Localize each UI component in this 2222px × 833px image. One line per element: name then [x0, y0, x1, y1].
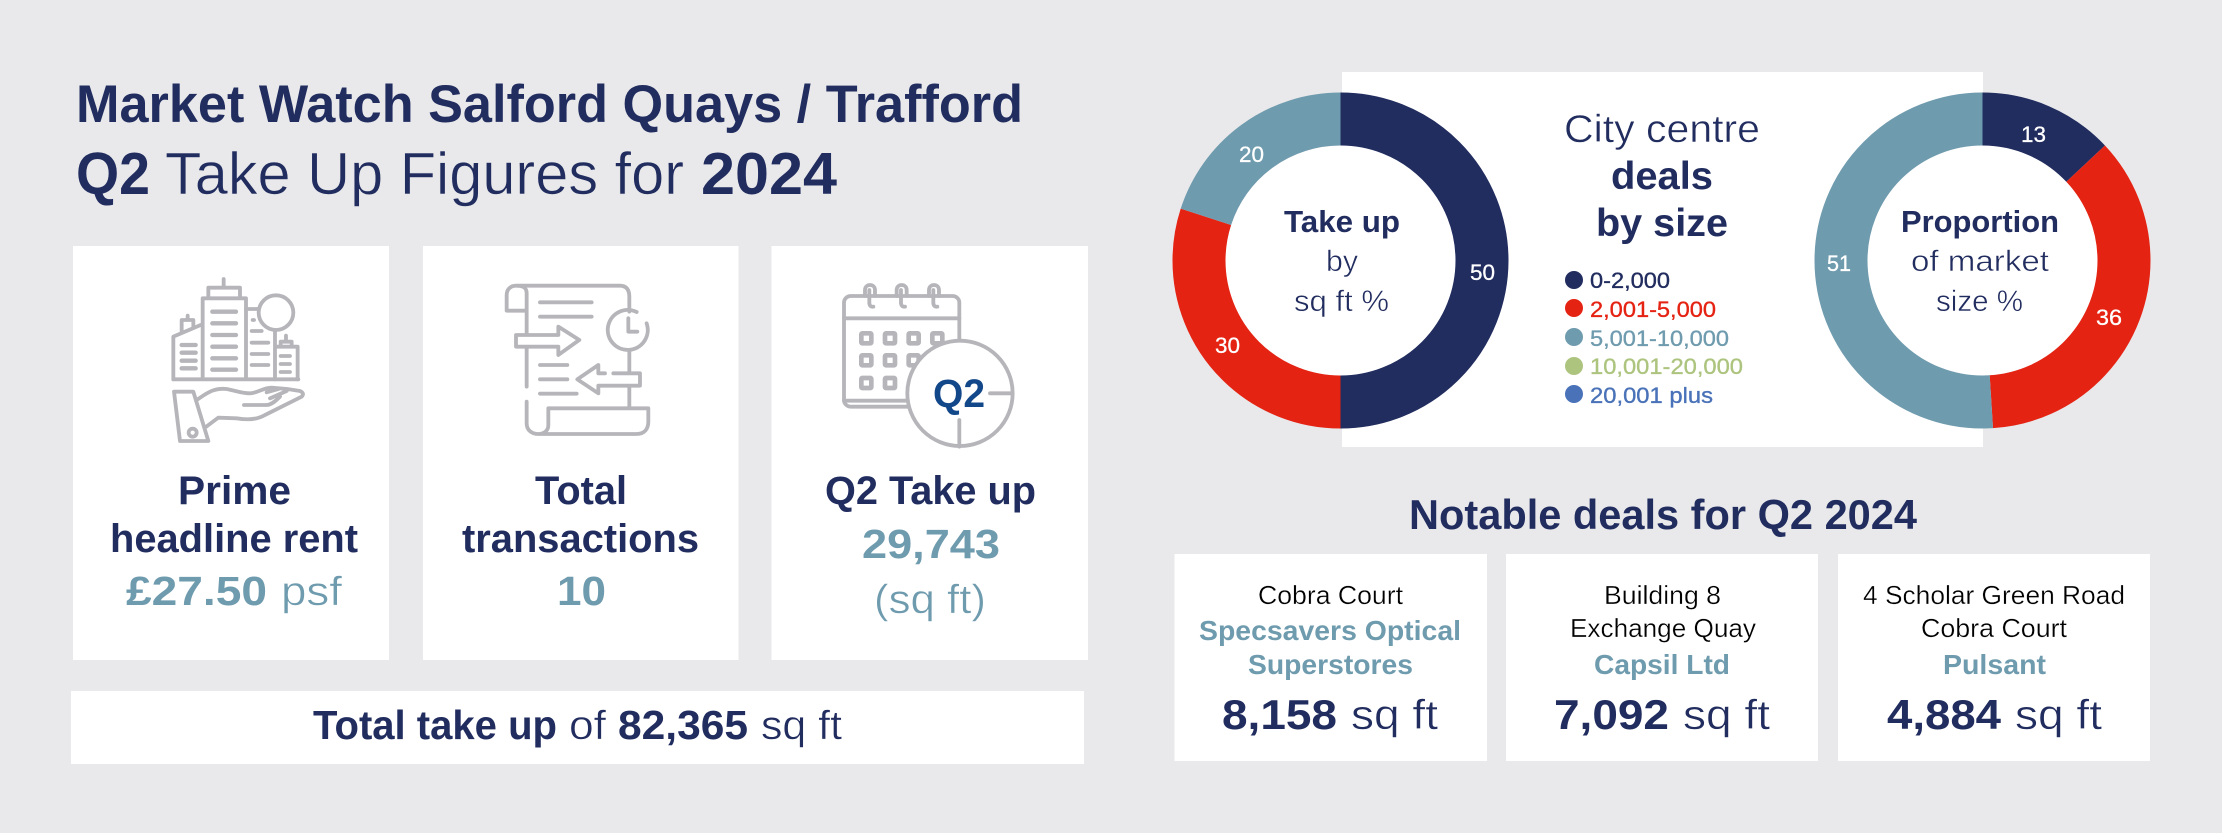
legend: 20,001 plus [1590, 383, 1713, 408]
donut chart: take up by sq ft [1199, 119, 1495, 402]
value: Q2 take up [862, 521, 1000, 622]
label: prime headline rent [110, 469, 358, 561]
label: prime headline rent: Prime [178, 469, 291, 513]
legend: 5,001-10,000 [1590, 326, 1729, 351]
deal card: Capsil: Capsil Ltd [1594, 649, 1730, 680]
donut chart: take up by sq ft: 30 [1215, 333, 1240, 358]
legend: 2,001-5,000 [1590, 297, 1716, 322]
donut centre label: take up [1284, 204, 1400, 318]
donut chart: proportion of market size [1827, 119, 2124, 402]
deal card: Capsil: Building 8 [1604, 580, 1721, 610]
value: rent: £27.50 [126, 568, 267, 614]
icon: scroll with arrows and clock [507, 286, 648, 434]
deal card: Specsavers [1174, 554, 1487, 761]
label: prime headline rent: headline rent [110, 517, 358, 561]
deal card: Capsil [1506, 554, 1818, 761]
heading: city centre deals by size: deals [1611, 155, 1713, 198]
deal card: Pulsant: 4 Scholar Green Road [1863, 580, 2125, 610]
deal card: Specsavers: Cobra Court [1258, 580, 1404, 610]
panel: city centre deals by size [1342, 72, 1983, 447]
deal card: Pulsant [1838, 554, 2150, 761]
total take up bar [71, 691, 1084, 764]
heading: city centre deals by size [1564, 108, 1760, 245]
label: total transactions: Total [535, 469, 627, 513]
deal card: Pulsant: Cobra Court [1921, 613, 2068, 643]
title [76, 75, 1023, 207]
donut centre label: take up: Take up [1284, 204, 1400, 239]
icon: calendar with Q2 clock [844, 285, 1013, 447]
deal card: Specsavers: Superstores [1248, 649, 1413, 680]
donut centre label: take up: sq ft % [1294, 285, 1389, 318]
donut chart: proportion of market size: 51 [1827, 251, 1851, 276]
value: rent [126, 568, 343, 614]
deal card: Pulsant: Pulsant [1943, 649, 2046, 680]
value: Q2 take up: (sq ft) [874, 576, 986, 622]
value: rent: psf [281, 568, 343, 614]
donut centre label: proportion: Proportion [1901, 204, 2059, 239]
legend: 0-2,000 [1590, 268, 1670, 293]
title: 2024 [701, 141, 837, 207]
donut centre label: proportion: of market [1911, 245, 2050, 278]
total take up bar: sq ft [761, 702, 843, 748]
icon: buildings on open hand [173, 279, 303, 441]
panel: Q2 take up [772, 246, 1088, 660]
donut centre label: proportion: size % [1936, 285, 2023, 318]
total take up bar: Total take up [313, 702, 557, 748]
total take up bar: of [569, 702, 607, 748]
deal card: Pulsant: 4,884 [1887, 691, 2002, 738]
title: Market Watch Salford Quays / Trafford [76, 75, 1023, 134]
deal card: Specsavers: sq ft [1351, 691, 1438, 738]
total take up bar: 82,365 [618, 702, 748, 748]
donut chart: proportion of market size: 13 [2021, 122, 2046, 147]
label: total transactions [462, 469, 699, 561]
label: Q2 take up: Q2 Take up [825, 469, 1036, 513]
deal card: Capsil: Exchange Quay [1570, 613, 1756, 643]
legend [1565, 268, 1743, 408]
icon: calendar with Q2 clock: Q2 [933, 372, 985, 416]
deal card: Capsil: 7,092 [1554, 691, 1669, 738]
donut chart: proportion of market size: 36 [2096, 305, 2122, 330]
deal card: Pulsant: sq ft [2015, 691, 2102, 738]
panel: total transactions [423, 246, 738, 660]
donut chart: take up by sq ft: 20 [1239, 142, 1264, 167]
deal card: Capsil: sq ft [1683, 691, 1770, 738]
panel: prime headline rent [73, 246, 389, 660]
value: Q2 take up: 29,743 [862, 521, 1000, 567]
heading: city centre deals by size: City centre [1564, 108, 1760, 151]
deal card: Specsavers: 8,158 [1222, 691, 1337, 738]
value: transactions: 10 [557, 568, 606, 614]
title: Q2 [76, 141, 150, 207]
title: Take Up Figures for [165, 141, 684, 207]
donut chart: take up by sq ft: 50 [1470, 260, 1495, 285]
deal card: Specsavers: Specsavers Optical [1199, 615, 1461, 646]
donut centre label: proportion [1901, 204, 2059, 318]
heading: city centre deals by size: by size [1596, 202, 1728, 245]
donut centre label: take up: by [1326, 245, 1358, 278]
legend: 10,001-20,000 [1590, 354, 1743, 379]
heading: notable deals: Notable deals for Q2 2024 [1409, 491, 1918, 538]
label: total transactions: transactions [462, 517, 699, 561]
